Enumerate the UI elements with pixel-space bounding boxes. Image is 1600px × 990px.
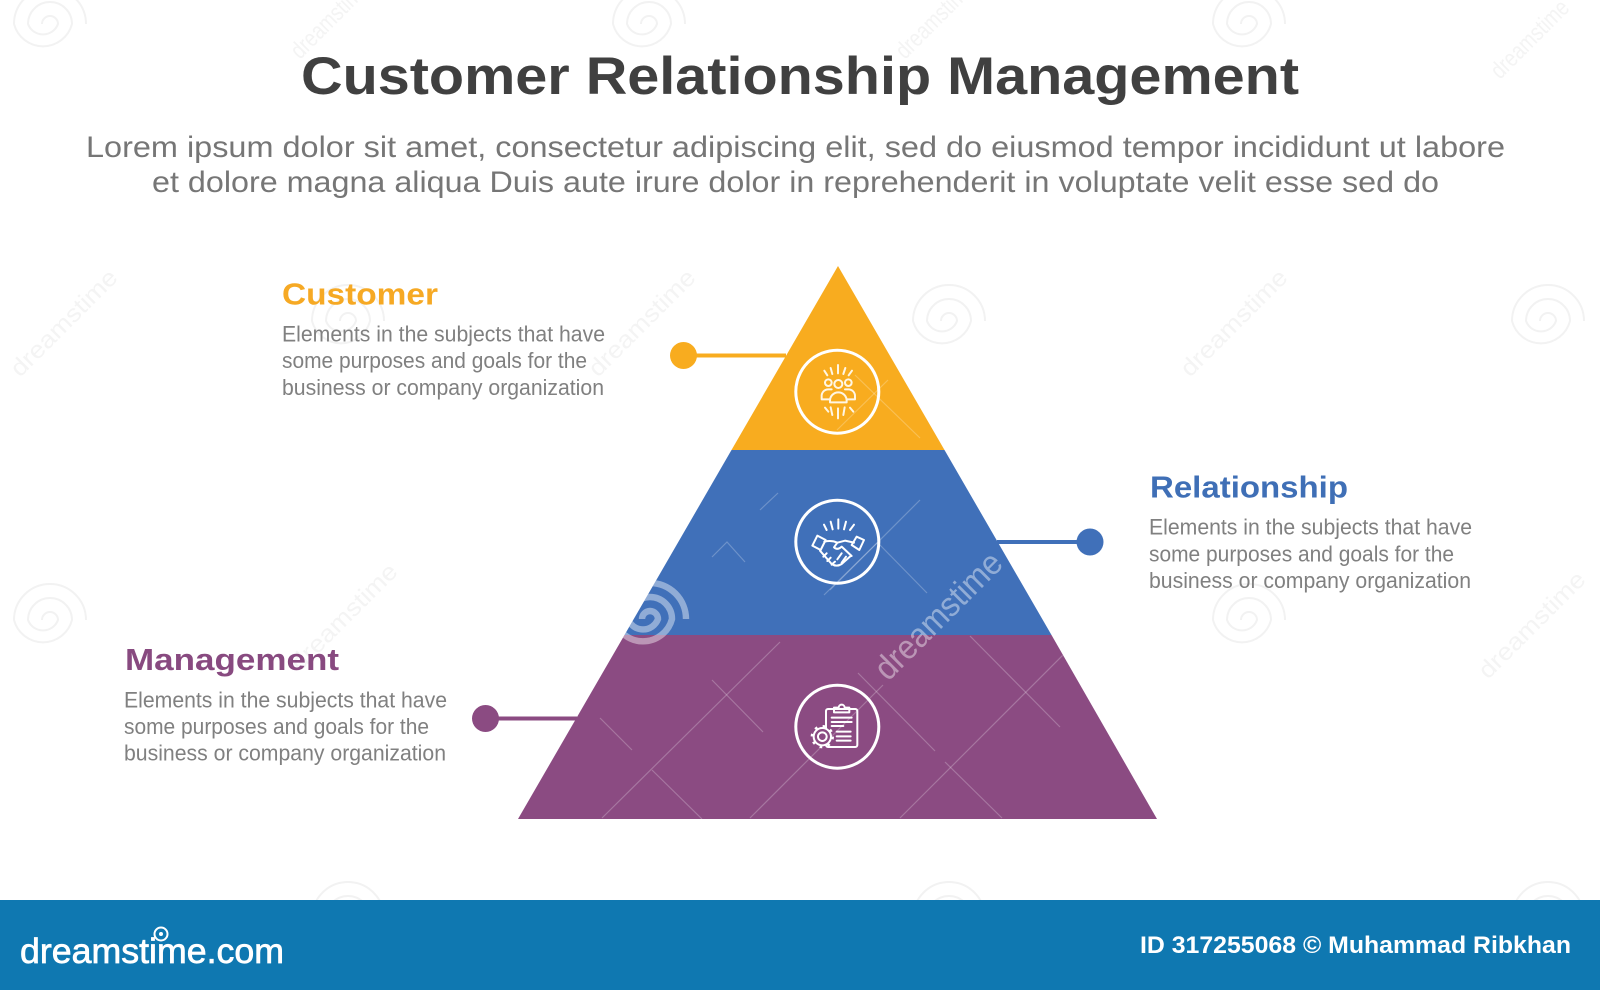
watermark lines on pyramid: [600, 375, 1100, 819]
text block: management: business or company organization: [124, 740, 446, 766]
text block: relationship: Relationship: [1150, 470, 1348, 504]
connector: relationship: [997, 528, 1104, 556]
text block: management: some purposes and goals for the: [124, 714, 429, 739]
text block: customer: Elements in the subjects that have: [282, 322, 605, 346]
text block: relationship: some purposes and goals for the: [1149, 542, 1454, 566]
connector: customer: [670, 342, 786, 369]
watermark spiral and wordmark on pyramid: dreamstime: [867, 544, 1010, 688]
background watermark: dreamstime: [1175, 264, 1293, 382]
text block: customer: Customer: [282, 276, 438, 312]
text block: relationship: Elements in the subjects that have: [1149, 514, 1472, 540]
watermark spiral and wordmark on pyramid: [623, 556, 1002, 679]
background watermark: dreamstime: [583, 264, 701, 382]
text block: management: Management: [125, 642, 339, 677]
footer logo: dreamstime.com: [20, 932, 284, 971]
text block: relationship: [1149, 470, 1472, 593]
text block: customer: some purposes and goals for the: [282, 348, 587, 373]
connector: management: [472, 705, 577, 732]
title: Customer Relationship Management: [301, 47, 1299, 106]
background watermark: dreamstime: [1473, 566, 1591, 684]
icon: clipboard with gear: [796, 685, 879, 768]
icon: handshake: [796, 500, 879, 583]
text block: customer: [282, 276, 605, 400]
pyramid tier: relationship: [624, 450, 1052, 635]
background watermark: dreamstime: [5, 264, 123, 382]
icon: customer group: [796, 350, 879, 433]
text block: relationship: business or company organization: [1149, 568, 1471, 593]
footer bar: [0, 900, 1600, 990]
text block: management: Elements in the subjects that have: [124, 688, 447, 712]
background watermark: dreamstime: [285, 558, 403, 676]
pyramid: [518, 266, 1157, 819]
subtitle: et dolore magna aliqua Duis aute irure dolor in reprehenderit in voluptate velit esse sed do: [152, 166, 1439, 199]
subtitle: [86, 131, 1505, 199]
subtitle: Lorem ipsum dolor sit amet, consectetur adipiscing elit, sed do eiusmod tempor incididunt ut labore: [86, 131, 1505, 164]
text block: management: [124, 642, 447, 766]
footer credit: ID 317255068 © Muhammad Ribkhan: [1140, 932, 1571, 959]
pyramid tier: management: [518, 635, 1157, 819]
text block: customer: business or company organization: [282, 375, 604, 400]
pyramid tier: customer: [732, 266, 944, 450]
